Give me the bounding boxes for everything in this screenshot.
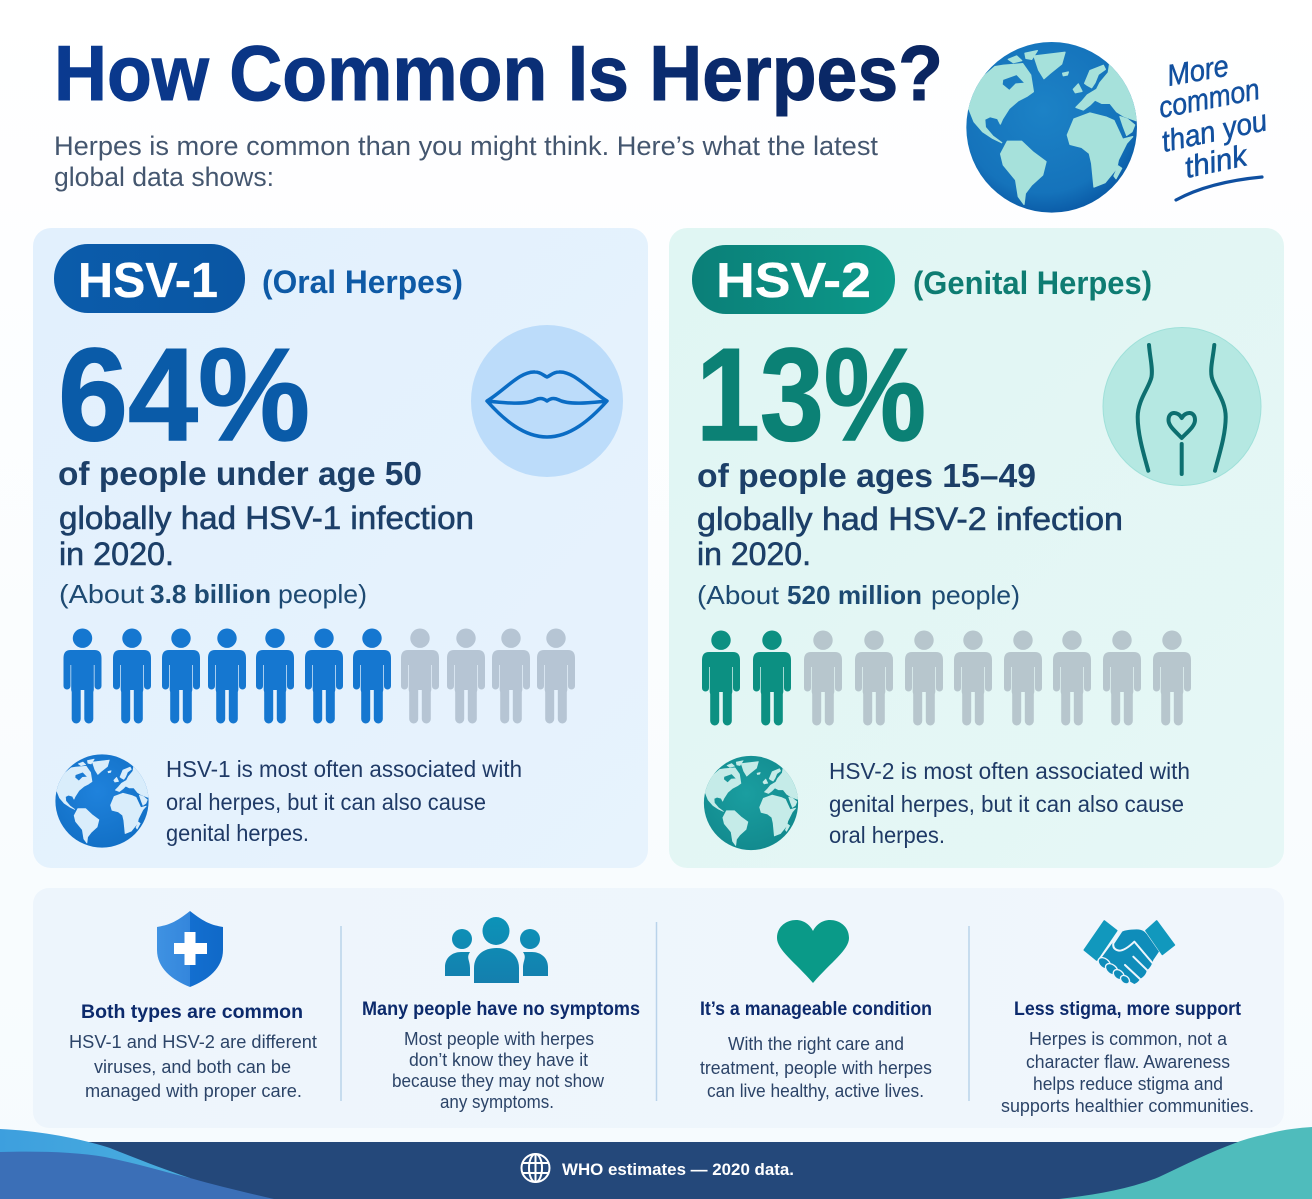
pictogram: 7 of 11 people (64, 628, 575, 724)
HSV-2 description: in 2020. (697, 536, 811, 572)
fact: no symptoms: any symptoms. (440, 1091, 554, 1112)
HSV-1 description: of people under age 50 (58, 455, 422, 492)
HSV-2 note (829, 758, 1190, 848)
subtitle (54, 131, 878, 192)
fact: both types are common: HSV-1 and HSV-2 are different (69, 1031, 317, 1052)
icon: footer globe (522, 1154, 550, 1182)
fact: both types are common: viruses, and both can be (94, 1056, 291, 1077)
pictogram: 2 of 10 people (702, 630, 1191, 726)
fact: less stigma (1001, 921, 1254, 1116)
fact: no symptoms (362, 917, 640, 1112)
subtitle: global data shows: (54, 162, 274, 192)
footer (0, 1127, 1312, 1199)
fact: manageable condition: With the right care and (728, 1033, 904, 1054)
HSV-1 note: oral herpes, but it can also cause (166, 789, 486, 815)
fact: less stigma: Herpes is common, not a (1029, 1028, 1228, 1049)
HSV-2 description: globally had HSV-2 infection (697, 501, 1123, 537)
handwritten note: common (1156, 73, 1262, 125)
HSV-1 note: HSV-1 is most often associated with (166, 756, 522, 782)
HSV-1 pill badge (54, 244, 245, 313)
fact: both types are common: Both types are common (81, 1002, 303, 1023)
fact: no symptoms: because they may not show (392, 1070, 605, 1091)
panel: HSV-1 (33, 228, 648, 868)
icon: large globe (966, 42, 1137, 213)
statistic: 13%: 13% (696, 321, 926, 468)
HSV-1 description (58, 455, 474, 572)
HSV-2 description (697, 457, 1123, 572)
fact: both types are common: managed with proper care. (85, 1080, 302, 1101)
HSV-2 population count: people) (931, 580, 1020, 610)
HSV-1 description: globally had HSV-1 infection (59, 500, 474, 536)
icon: small blue globe (55, 754, 149, 848)
handwritten note: think (1182, 139, 1252, 185)
HSV-1 subtitle: (Oral Herpes) (262, 264, 463, 300)
fact: less stigma: character flaw. Awareness (1026, 1051, 1230, 1072)
fact: less stigma: Less stigma, more support (1014, 999, 1242, 1020)
fact: no symptoms: Many people have no symptoms (362, 999, 640, 1020)
HSV-2 pill badge: HSV-2 (716, 254, 871, 308)
fact: no symptoms: Most people with herpes (404, 1028, 594, 1049)
HSV-2 subtitle: (Genital Herpes) (913, 265, 1152, 301)
title: How Common Is Herpes? (54, 29, 943, 117)
fact: manageable condition (700, 920, 932, 1101)
fact: less stigma: supports healthier communities. (1001, 1095, 1254, 1116)
fact: manageable condition: can live healthy, active lives. (707, 1080, 924, 1101)
icon: lower body (1103, 328, 1261, 486)
handwritten note: than you (1159, 104, 1270, 159)
HSV-1 pill badge: HSV-1 (78, 254, 218, 308)
HSV-1 population count: 3.8 billion (150, 579, 271, 609)
icon: lips (471, 325, 623, 477)
fact: less stigma: helps reduce stigma and (1033, 1073, 1223, 1094)
handwritten note: More (1164, 50, 1231, 93)
fact: manageable condition: It’s a manageable condition (700, 999, 932, 1020)
fact: manageable condition: treatment, people with herpes (700, 1057, 932, 1078)
HSV-1 note: genital herpes. (166, 820, 309, 846)
icon: heart (777, 920, 849, 983)
icon: handshake (1084, 921, 1174, 986)
fact: both types are common (69, 911, 317, 1101)
HSV-1 description: in 2020. (59, 536, 174, 572)
HSV-1 note (166, 756, 522, 846)
panel: key facts (33, 888, 1284, 1128)
HSV-2 note: oral herpes. (829, 822, 945, 848)
HSV-1 population count: (About (59, 579, 145, 609)
statistic: 64%: 64% (58, 321, 310, 468)
HSV-2 note: HSV-2 is most often associated with (829, 758, 1190, 784)
HSV-1 population count: people) (278, 579, 367, 609)
icon: shield (157, 911, 223, 987)
panel: HSV-2 (669, 228, 1284, 868)
HSV-2 population count (697, 580, 1020, 610)
HSV-2 population count: 520 million (787, 580, 922, 610)
icon: small teal globe (704, 756, 798, 850)
HSV-1 population count (59, 579, 367, 609)
fact: no symptoms: don’t know they have it (409, 1049, 588, 1070)
HSV-2 note: genital herpes, but it can also cause (829, 791, 1184, 817)
icon: group of people (445, 917, 548, 983)
handwritten note (1156, 50, 1270, 200)
HSV-2 pill badge (692, 245, 895, 314)
HSV-2 population count: (About (697, 580, 780, 610)
HSV-2 description: of people ages 15–49 (697, 457, 1036, 494)
footer source note: WHO estimates — 2020 data. (562, 1160, 794, 1179)
subtitle: Herpes is more common than you might think. Here’s what the latest (54, 131, 878, 161)
